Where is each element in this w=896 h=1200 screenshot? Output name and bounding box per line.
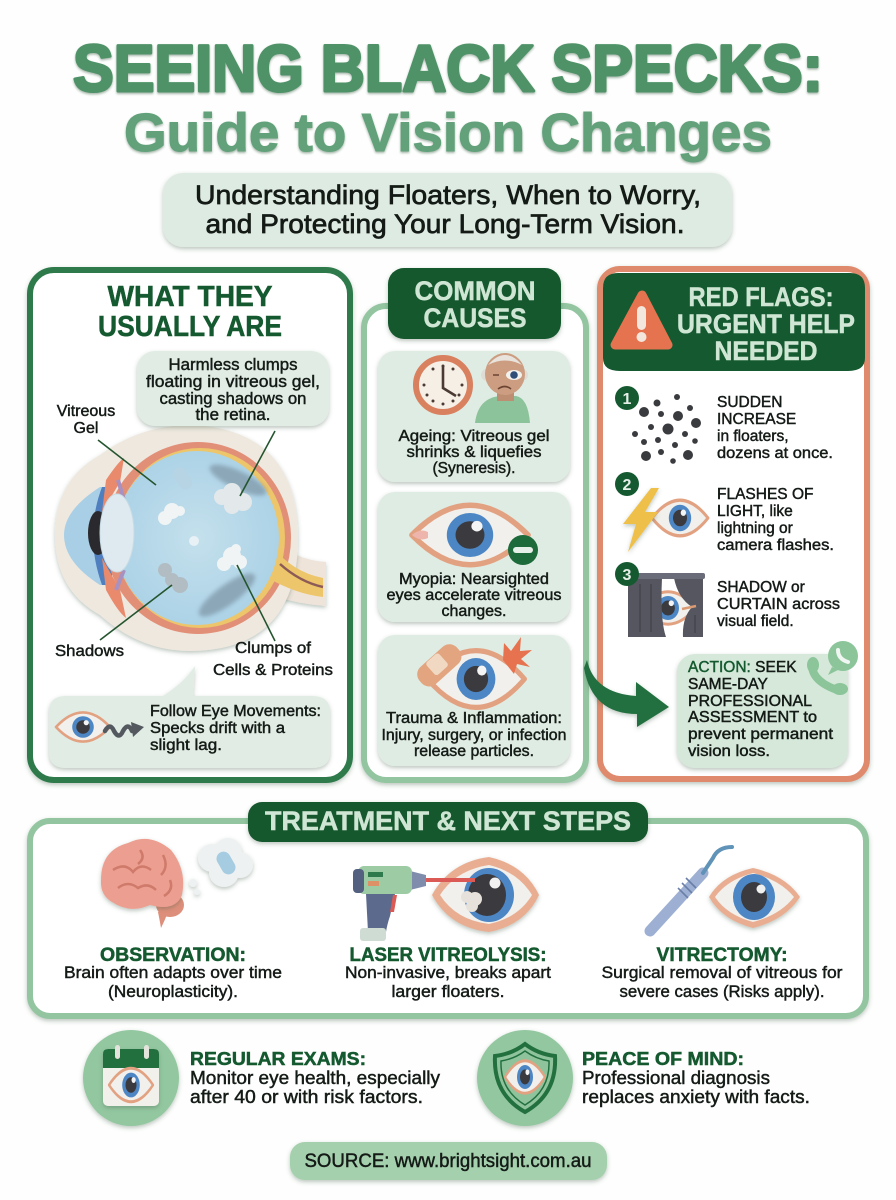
block: regular exams: [83, 1030, 440, 1126]
text: flashes of light: lightning or: [717, 520, 793, 537]
icon: shield with eye: [477, 1030, 573, 1126]
panel: red flags: [600, 269, 867, 779]
heading: what they usually are: USUALLY ARE: [98, 311, 282, 343]
text: sudden increase: [717, 394, 833, 462]
subtitle pill: and Protecting Your Long-Term Vision.: [206, 209, 684, 239]
heading: red flags: RED FLAGS:: [688, 282, 834, 312]
card: trauma: Injury, surgery, or infection: [382, 727, 566, 744]
icon: eye with drifting arrow: [56, 712, 144, 742]
label: vitreous gel: [57, 403, 115, 437]
text: shadow or curtain: SHADOW or: [717, 579, 805, 596]
title: Guide to Vision Changes: [124, 103, 772, 163]
label: vitreous gel: Gel: [74, 420, 98, 437]
subtitle pill: [163, 173, 732, 247]
card: trauma: release particles.: [414, 743, 534, 760]
label: vitreous gel: Vitreous: [57, 403, 115, 420]
text: peace of mind: replaces anxiety with facts.: [582, 1087, 810, 1107]
icon: brain and thought cloud: [101, 838, 253, 928]
badge 3: 3: [623, 567, 632, 584]
badge 1: 1: [623, 391, 632, 408]
text: regular exams: after 40 or with risk factors.: [190, 1087, 423, 1107]
card: myopia: [378, 492, 570, 622]
icon: clock: [416, 358, 470, 412]
heading: red flags: [603, 273, 865, 371]
text: peace of mind: PEACE OF MIND:: [582, 1048, 744, 1069]
treatment: laser vitreolysis: LASER VITREOLYSIS:: [350, 945, 546, 966]
eye cross-section diagram: [55, 425, 326, 651]
callout: follow eye movements: [49, 666, 330, 768]
icon: laser device and eye: [353, 857, 539, 941]
callout: follow eye movements: slight lag.: [150, 737, 222, 754]
text: peace of mind: Professional diagnosis: [582, 1068, 770, 1088]
badge 2: 2: [623, 477, 632, 494]
callout: action: [677, 641, 858, 768]
treatment: observation: (Neuroplasticity).: [108, 983, 238, 1001]
text: regular exams: Monitor eye health, especially: [190, 1068, 440, 1088]
heading: treatment: TREATMENT & NEXT STEPS: [265, 806, 631, 836]
callout: harmless clumps: [137, 351, 329, 426]
text: sudden increase: INCREASE: [717, 411, 796, 428]
text: shadow or curtain: [717, 579, 840, 630]
badge 1: [615, 386, 639, 410]
treatment: laser vitreolysis: [345, 857, 551, 1001]
text: flashes of light: FLASHES OF: [717, 486, 813, 503]
heading: what they usually are: [98, 281, 282, 343]
callout: harmless clumps: Harmless clumps: [168, 356, 298, 374]
callout: action: SAME-DAY: [688, 676, 768, 693]
callout: action: ASSESSMENT to: [688, 709, 817, 726]
text: sudden increase: SUDDEN: [717, 394, 782, 411]
text: shadow or curtain: CURTAIN across: [717, 596, 840, 613]
heading: treatment: [248, 802, 648, 842]
treatment: observation: OBSERVATION:: [100, 945, 246, 966]
treatment: observation: Brain often adapts over time: [64, 964, 282, 982]
callout: action: vision loss.: [688, 743, 770, 760]
card: trauma: Trauma & Inflammation:: [386, 710, 562, 727]
red flag 3: shadow or curtain: [615, 562, 840, 637]
label: clumps: [213, 640, 333, 679]
subtitle pill: Understanding Floaters, When to Worry,: [195, 180, 701, 210]
leader lines: [98, 431, 275, 641]
icon: curtain and eye: [627, 573, 705, 637]
title: [73, 31, 823, 163]
badge 2: [615, 472, 639, 496]
treatment: vitrectomy: Surgical removal of vitreous for: [602, 964, 843, 982]
icon: surgical tool and eye: [650, 847, 800, 931]
heading: what they usually are: WHAT THEY: [108, 281, 272, 313]
callout: follow eye movements: Follow Eye Movements:: [150, 703, 321, 720]
icon: cluster of specks: [632, 394, 701, 464]
icon: eye with minus badge: [412, 505, 538, 565]
icon: calendar with eye: [83, 1030, 179, 1126]
callout: harmless clumps: the retina.: [196, 406, 270, 424]
label: shadows: Shadows: [55, 643, 124, 660]
text: peace of mind: [582, 1048, 810, 1107]
text: flashes of light: LIGHT, like: [717, 503, 793, 520]
card: myopia: Myopia: Nearsighted: [399, 571, 549, 588]
callout: harmless clumps: floating in vitreous gel,: [146, 373, 320, 391]
text: regular exams: [190, 1048, 440, 1107]
red flag 2: flashes of light: [615, 472, 834, 554]
text: sudden increase: dozens at once.: [717, 445, 833, 462]
heading: red flags: URGENT HELP: [677, 309, 855, 339]
card: ageing: (Syneresis).: [432, 460, 516, 477]
treatment: laser vitreolysis: Non-invasive, breaks apart: [345, 964, 551, 982]
text: shadow or curtain: visual field.: [717, 613, 794, 630]
text: flashes of light: camera flashes.: [717, 537, 834, 554]
heading: common causes: CAUSES: [424, 303, 526, 333]
heading: common causes: COMMON: [414, 276, 536, 306]
panel: common causes: [364, 268, 586, 780]
callout: harmless clumps: casting shadows on: [160, 390, 306, 408]
icon: lightning and eye: [623, 488, 708, 552]
icon: injured eye with bandage: [413, 637, 532, 707]
heading: common causes: [388, 268, 561, 339]
panel: treatment and next steps: [30, 802, 866, 1016]
icon: elderly man: [475, 353, 530, 423]
source pill: [290, 1142, 607, 1180]
label: clumps: Clumps of: [235, 640, 312, 657]
callout: action: ACTION: SEEK: [688, 659, 797, 676]
title: SEEING BLACK SPECKS:: [73, 31, 823, 105]
callout: action: PROFESSIONAL: [688, 693, 812, 710]
card: ageing: shrinks & liquefies: [406, 444, 542, 461]
block: peace of mind: [477, 1030, 810, 1126]
callout: action: prevent permanent: [688, 726, 834, 743]
label: clumps: Cells & Proteins: [213, 662, 333, 679]
card: ageing: Ageing: Vitreous gel: [398, 428, 550, 445]
text: regular exams: REGULAR EXAMS:: [190, 1048, 366, 1069]
callout: follow eye movements: Specks drift with a: [150, 720, 285, 737]
icon: phone and chat bubble: [807, 641, 858, 695]
treatment: laser vitreolysis: larger floaters.: [392, 983, 504, 1001]
card: myopia: changes.: [442, 603, 506, 620]
icon: warning triangle: [615, 295, 668, 345]
source pill: SOURCE: www.brightsight.com.au: [304, 1151, 592, 1172]
card: ageing: [378, 351, 570, 482]
panel: what they usually are: [30, 270, 350, 780]
card: myopia: eyes accelerate vitreous: [386, 587, 562, 604]
treatment: vitrectomy: [602, 847, 843, 1001]
arrow: causes to action: [584, 660, 669, 727]
treatment: vitrectomy: severe cases (Risks apply).: [620, 983, 824, 1001]
treatment: vitrectomy: VITRECTOMY:: [656, 945, 788, 966]
card: trauma: [378, 635, 570, 766]
heading: red flags: NEEDED: [714, 336, 818, 366]
red flag 1: sudden increase: [615, 386, 833, 464]
text: sudden increase: in floaters,: [717, 428, 789, 445]
text: flashes of light: [717, 486, 834, 554]
treatment: observation: [64, 838, 282, 1001]
badge 3: [615, 562, 639, 586]
